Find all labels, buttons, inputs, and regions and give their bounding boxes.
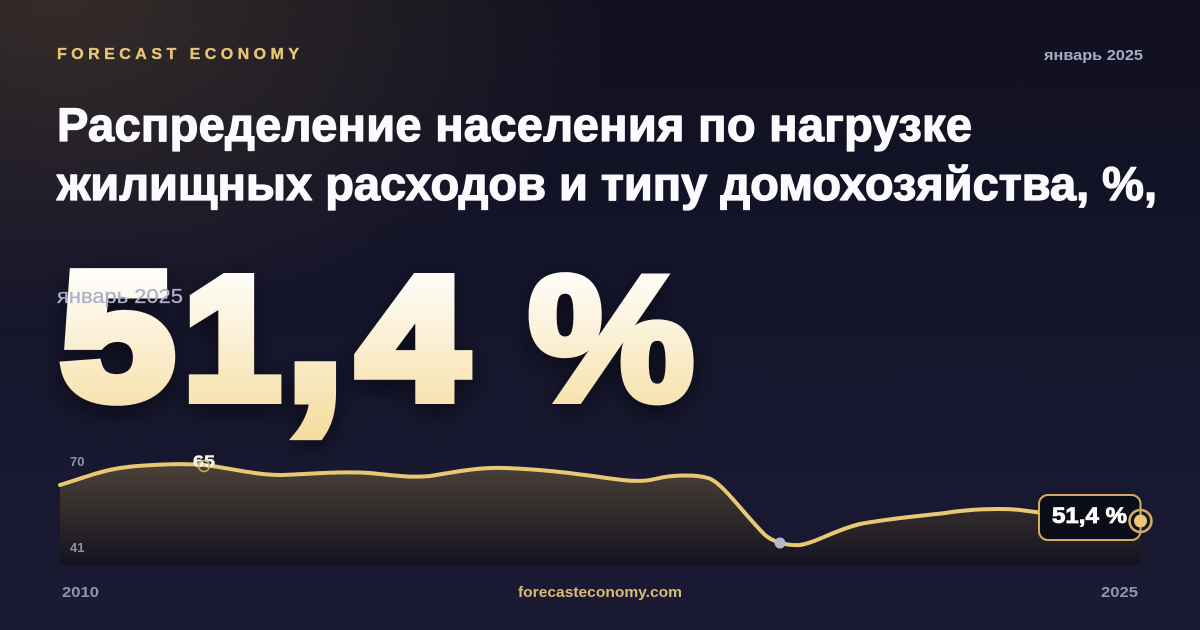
- big value: ,: [283, 192, 347, 449]
- overlapping date label: январь 2025: [57, 286, 183, 308]
- big value: 5: [61, 235, 174, 436]
- end year: 2025: [1101, 584, 1138, 601]
- chart line: [60, 464, 1141, 545]
- peak label: 65: [193, 452, 215, 471]
- brand label: FORECAST ECONOMY: [57, 46, 299, 63]
- minimum marker: [774, 538, 786, 548]
- start year: 2010: [62, 584, 99, 601]
- end marker: [1130, 510, 1152, 532]
- big value: 4: [358, 242, 467, 435]
- big value: 1: [184, 241, 280, 435]
- big value: %: [528, 239, 694, 438]
- peak marker: [198, 460, 210, 472]
- date top right: январь 2025: [1044, 47, 1143, 64]
- chart area: [60, 464, 1141, 565]
- site url: forecasteconomy.com: [518, 584, 682, 601]
- title: жилищных расходов и типу домохозяйства, %,: [56, 157, 1157, 210]
- title: [56, 98, 1157, 210]
- title: Распределение населения по нагрузке: [57, 98, 972, 151]
- value callout: 51,4 %: [1052, 503, 1127, 528]
- value callout: [1039, 495, 1140, 540]
- big value: [61, 192, 694, 449]
- line chart: [60, 452, 1152, 565]
- y axis min label: 41: [70, 540, 84, 555]
- y axis max label: 70: [70, 454, 84, 469]
